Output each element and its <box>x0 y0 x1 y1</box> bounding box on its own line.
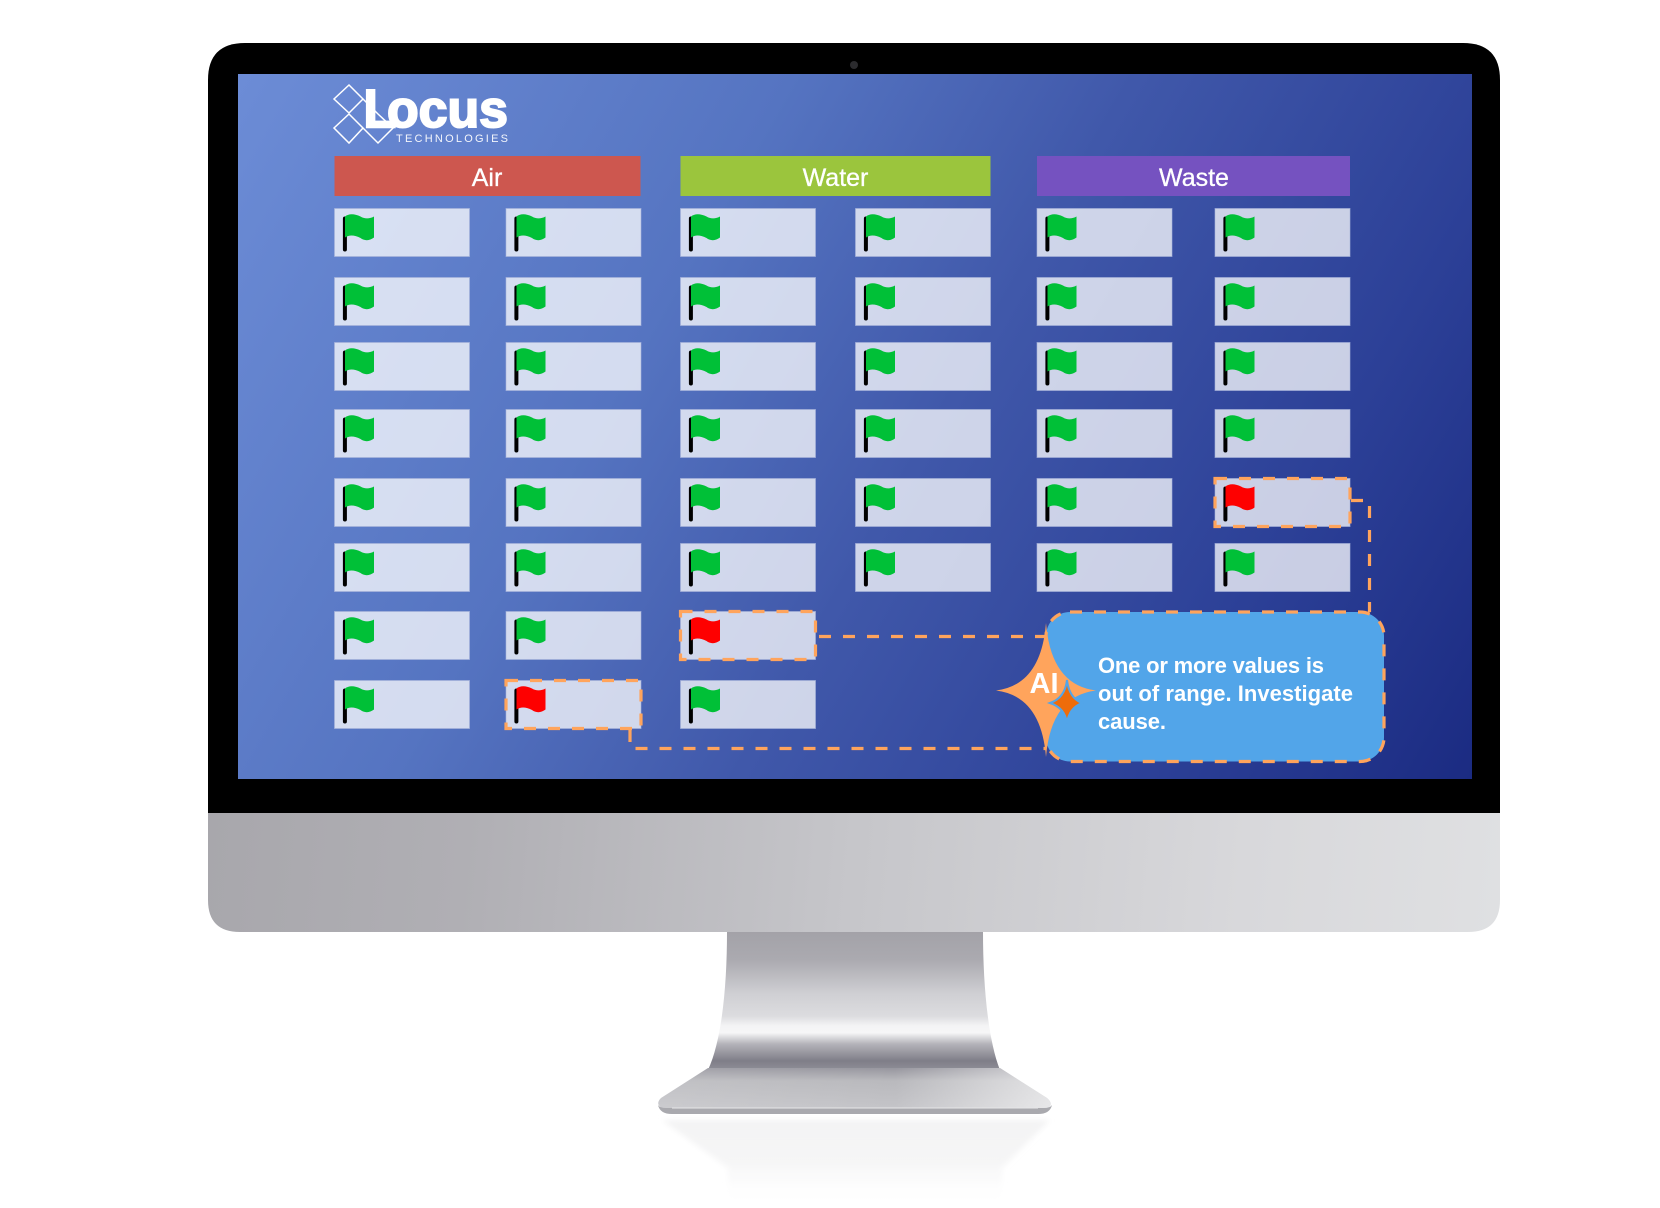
icon: AI star: AI <box>1030 668 1058 700</box>
logo: Locus Technologies <box>334 78 508 145</box>
status cell <box>1037 544 1172 592</box>
logo: Locus Technologies: ocus <box>387 81 508 139</box>
panel: Waste <box>1037 156 1350 592</box>
status cell <box>1037 208 1172 256</box>
connector: air alert to callout <box>630 730 1046 748</box>
screen <box>238 74 1472 779</box>
status cell <box>334 410 470 458</box>
status cell <box>680 478 816 526</box>
monitor stand <box>658 932 1052 1114</box>
status cell <box>856 544 990 592</box>
callout text: cause. <box>1098 709 1166 734</box>
status cell: red flag <box>680 612 816 660</box>
status cell: red flag <box>1215 478 1350 526</box>
panel: Water <box>680 156 990 728</box>
header: Air: Air <box>472 164 502 192</box>
callout text: One or more values is <box>1098 653 1324 678</box>
status cell <box>334 544 470 592</box>
status cell <box>506 612 641 660</box>
status cell <box>1215 278 1350 326</box>
status cell <box>506 278 641 326</box>
monitor chin <box>208 813 1500 932</box>
webcam <box>850 61 858 69</box>
header: Waste <box>1037 156 1350 196</box>
connector: water alert to callout <box>819 635 1046 638</box>
status cell <box>680 680 816 728</box>
status cell <box>334 278 470 326</box>
status cell <box>1037 410 1172 458</box>
header: Air <box>334 156 640 196</box>
status cell <box>334 612 470 660</box>
header: Water: Water <box>803 164 868 192</box>
status cell <box>506 342 641 390</box>
status cell <box>680 410 816 458</box>
panel: Air <box>334 156 641 728</box>
status cell <box>1215 342 1350 390</box>
status cell <box>856 478 990 526</box>
stand reflection <box>662 1120 1050 1208</box>
status cell <box>1215 410 1350 458</box>
status cell <box>1037 478 1172 526</box>
header: Waste: Waste <box>1159 164 1229 192</box>
status cell <box>680 208 816 256</box>
status cell <box>1215 544 1350 592</box>
status cell <box>334 342 470 390</box>
monitor bezel <box>208 43 1500 813</box>
status cell <box>1037 278 1172 326</box>
status cell <box>680 544 816 592</box>
status cell <box>334 208 470 256</box>
status cell <box>506 478 641 526</box>
status cell <box>506 410 641 458</box>
status cell <box>856 410 990 458</box>
status cell <box>1215 208 1350 256</box>
status cell <box>680 278 816 326</box>
status cell <box>334 478 470 526</box>
status cell <box>856 278 990 326</box>
status cell <box>506 544 641 592</box>
logo: Locus Technologies: TECHNOLOGIES <box>396 133 508 145</box>
status cell <box>506 208 641 256</box>
callout <box>996 612 1384 762</box>
status cell <box>856 208 990 256</box>
callout text <box>1098 653 1353 734</box>
logo: Locus Technologies: L <box>363 78 397 140</box>
status cell <box>856 342 990 390</box>
callout text: out of range. Investigate <box>1098 681 1353 706</box>
status cell <box>334 680 470 728</box>
header: Water <box>680 156 990 196</box>
connector: waste alert to callout <box>1351 500 1370 612</box>
icon: AI star <box>996 623 1096 757</box>
status cell: red flag <box>506 680 641 728</box>
status cell <box>680 342 816 390</box>
status cell <box>1037 342 1172 390</box>
